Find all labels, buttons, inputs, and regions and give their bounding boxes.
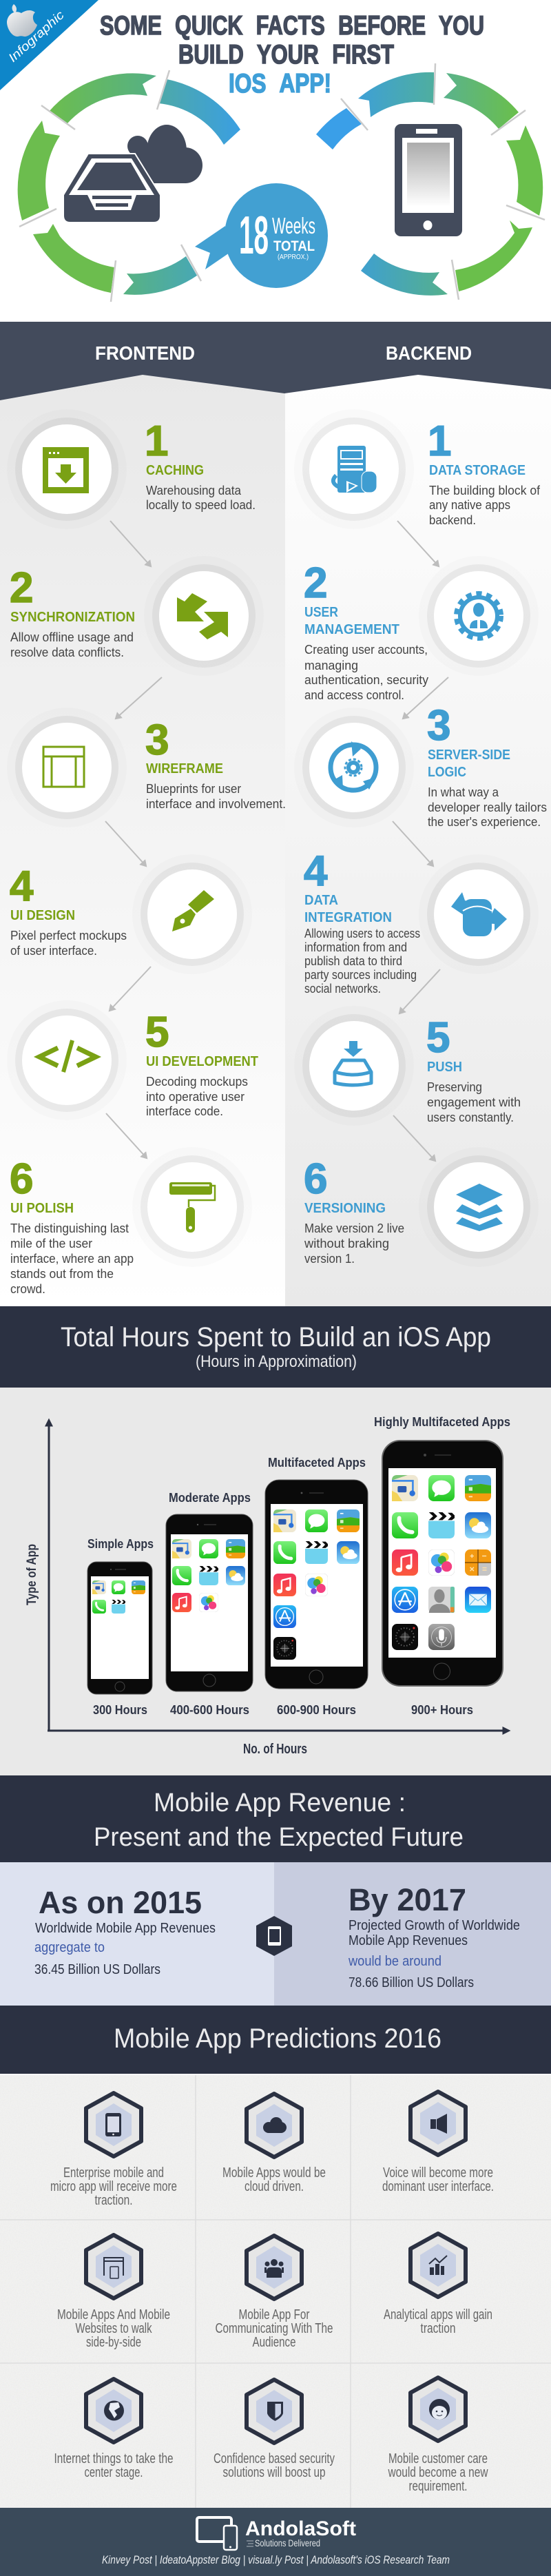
text: [222, 2165, 326, 2194]
number: 5: [426, 1014, 450, 1062]
description: [146, 1074, 248, 1118]
icon: browser and phone: [86, 2235, 141, 2298]
text: solutions will boost up: [223, 2465, 325, 2480]
text: center stage.: [84, 2465, 143, 2480]
description: party sources including: [304, 967, 417, 982]
description: [10, 630, 134, 659]
title: IOS APP!: [229, 69, 331, 99]
description: [304, 926, 420, 996]
heading: INTEGRATION: [304, 910, 392, 925]
heading: UI DESIGN: [10, 908, 75, 923]
heading: MANAGEMENT: [304, 622, 399, 637]
panel: by 2017: 78.66 Billion US Dollars: [349, 1975, 474, 1990]
heading: UI DEVELOPMENT: [146, 1054, 258, 1069]
icon: caching: [7, 409, 127, 529]
description: [427, 1080, 521, 1124]
panel: as on 2015: [0, 1862, 274, 2006]
title: BUILD YOUR FIRST: [178, 40, 394, 70]
text: [57, 2307, 170, 2350]
panel: as on 2015: aggregate to: [34, 1940, 105, 1955]
phone: moderate apps: [166, 1491, 253, 1717]
heading: USER: [304, 605, 338, 620]
panel: by 2017: Mobile App Revenues: [349, 1933, 468, 1948]
description: [304, 642, 429, 702]
icon: pen nib: [132, 854, 252, 974]
icon: speaker: [410, 2092, 466, 2155]
description: version 1.: [304, 1251, 355, 1266]
backend step 2: user management: [304, 556, 539, 702]
text: Voice will become more: [383, 2165, 493, 2181]
number: 5: [145, 1009, 169, 1056]
text: would become a new: [388, 2465, 488, 2480]
icon: growth chart: [410, 2234, 466, 2297]
description: interface and involvement.: [146, 796, 286, 811]
icon: cycle with gear: [294, 708, 414, 827]
heading: [428, 748, 510, 780]
callout: 18 weeks total: [195, 183, 328, 288]
heading: [304, 605, 399, 637]
text: cloud driven.: [245, 2179, 304, 2194]
description: The building block of: [429, 483, 541, 497]
panel: by 2017: Projected Growth of Worldwide: [349, 1918, 520, 1933]
corner banner: infographic: [0, 0, 98, 90]
logo: wordmark: Solutions Delivered: [255, 2538, 320, 2548]
text: Enterprise mobile and: [63, 2165, 164, 2181]
description: [146, 781, 286, 811]
text: Mobile Apps And Mobile: [57, 2307, 170, 2322]
heading: DATA: [304, 893, 338, 908]
text: Mobile Apps would be: [222, 2165, 326, 2181]
left cycle arrows: [18, 70, 240, 302]
icon: code brackets: [7, 1000, 127, 1120]
text: traction: [420, 2321, 456, 2336]
icon: shield: [247, 2380, 302, 2443]
section heading: total hours: (Hours in Approximation): [196, 1352, 357, 1371]
phone: moderate apps: 400-600 Hours: [170, 1703, 249, 1717]
number: 6: [304, 1155, 327, 1203]
number: 1: [145, 418, 168, 465]
description: stands out from the: [10, 1266, 114, 1281]
description: interface code.: [146, 1104, 223, 1118]
frontend backend backgrounds: [0, 322, 551, 1306]
callout: 18 weeks total: 18: [239, 205, 269, 265]
frontend step 5: ui development: [7, 1000, 258, 1120]
heading: DATA STORAGE: [429, 463, 526, 478]
text: [50, 2165, 177, 2208]
phone: highly multifaceted apps: [374, 1415, 510, 1717]
icon: phone in hexagon: [256, 1916, 292, 1956]
heading: WIREFRAME: [146, 761, 223, 776]
description: Allow offline usage and: [10, 630, 134, 644]
backend step 3: server-side logic: [294, 702, 547, 829]
text: [384, 2307, 492, 2336]
heading: [304, 893, 392, 925]
header band: BACKEND: [386, 342, 472, 364]
icon: gear with user: [419, 556, 539, 676]
panel: predictions grid: [0, 2075, 551, 2508]
icon: synchronization: [144, 556, 264, 676]
panel: as on 2015: Worldwide Mobile App Revenues: [35, 1921, 216, 1936]
title: [100, 11, 484, 99]
text: Confidence based security: [214, 2451, 335, 2466]
description: backend.: [429, 513, 476, 527]
phone: highly multifaceted apps: Highly Multifaceted Apps: [374, 1415, 510, 1429]
description: crowd.: [10, 1281, 45, 1296]
description: into operative user: [146, 1089, 245, 1104]
heading: LOGIC: [428, 765, 466, 780]
panel: by 2017: By 2017: [349, 1882, 466, 1917]
arrows between frontend steps: [105, 521, 162, 1158]
text: dominant user interface.: [382, 2179, 494, 2194]
callout: 18 weeks total: Weeks: [272, 213, 315, 238]
text: [388, 2451, 488, 2494]
logo: devices: [197, 2517, 237, 2550]
section heading: predictions: Mobile App Predictions 2016: [114, 2023, 441, 2054]
number: 2: [304, 559, 327, 607]
section heading: mobile app revenue: Present and the Expected Future: [94, 1823, 464, 1852]
frontend step 2: synchronization: [10, 556, 264, 676]
description: Blueprints for user: [146, 781, 241, 796]
text: Analytical apps will gain: [384, 2307, 492, 2322]
description: mile of the user: [10, 1236, 92, 1250]
icon: data storage: [294, 409, 414, 529]
phone: multifaceted apps: Multifaceted Apps: [268, 1456, 366, 1470]
panel: as on 2015: 36.45 Billion US Dollars: [34, 1962, 160, 1977]
backend step 1: data storage: [294, 409, 541, 529]
section heading: total hours: [0, 1306, 551, 1388]
text: side-by-side: [86, 2335, 141, 2350]
chart axes: [48, 1421, 508, 1731]
frontend step 3: wireframe: [7, 708, 286, 827]
number: 3: [145, 717, 169, 764]
number: 2: [10, 564, 33, 612]
description: publish data to third: [304, 954, 402, 968]
text: [214, 2451, 335, 2480]
heading: UI POLISH: [10, 1201, 74, 1216]
icon: layers: [419, 1147, 539, 1267]
description: Warehousing data: [146, 483, 242, 497]
heading: CACHING: [146, 463, 204, 478]
text: Websites to walk: [76, 2321, 152, 2336]
prediction 4: [57, 2235, 170, 2350]
phone: multifaceted apps: [265, 1456, 368, 1717]
description: Creating user accounts,: [304, 642, 428, 657]
description: [304, 1221, 404, 1266]
description: Decoding mockups: [146, 1074, 248, 1089]
description: [429, 483, 541, 527]
icon: paint roller: [132, 1147, 252, 1267]
text: [54, 2451, 174, 2480]
footer: [0, 2508, 551, 2576]
icon: smartphone: [395, 124, 462, 236]
frontend step 6: ui polish: [10, 1147, 252, 1296]
icon: phone: [86, 2093, 141, 2156]
prediction 9: [388, 2378, 488, 2494]
prediction 2: [222, 2094, 326, 2194]
callout: 18 weeks total: (APPROX.): [278, 254, 309, 261]
text: Mobile App For: [238, 2307, 310, 2322]
header band: FRONTEND: [95, 342, 195, 364]
description: In what way a: [428, 785, 499, 799]
logo: wordmark: AndolaSoft: [245, 2517, 356, 2540]
prediction 1: [50, 2093, 177, 2208]
number: 4: [304, 847, 328, 895]
description: authentication, security: [304, 672, 429, 687]
icon: globe: [86, 2379, 141, 2442]
number: 6: [10, 1155, 33, 1203]
prediction 3: [382, 2092, 494, 2194]
text: [215, 2307, 333, 2350]
arrows between backend steps: [393, 521, 448, 1161]
text: requirement.: [409, 2479, 467, 2494]
description: without braking: [304, 1236, 389, 1250]
description: and access control.: [304, 688, 404, 702]
description: of user interface.: [10, 943, 97, 958]
heading: VERSIONING: [304, 1201, 386, 1216]
hero section: [0, 0, 551, 322]
section heading: total hours: Total Hours Spent to Build an iOS App: [61, 1322, 491, 1352]
icon: wireframe: [7, 708, 127, 827]
description: [146, 483, 256, 512]
icon: cloud: [247, 2094, 302, 2157]
text: micro app will receive more: [50, 2179, 177, 2194]
backend step 5: push: [294, 1006, 521, 1126]
number: 4: [10, 863, 34, 910]
banner label: Infographic: [6, 8, 67, 65]
description: the user's experience.: [428, 814, 541, 829]
text: traction.: [95, 2193, 132, 2208]
panel: hours chart: [0, 1388, 551, 1775]
heading: SERVER-SIDE: [428, 748, 510, 763]
phone: simple apps: 300 Hours: [93, 1703, 147, 1717]
header band: [0, 322, 551, 400]
heading: SYNCHRONIZATION: [10, 610, 135, 625]
description: [10, 1221, 134, 1296]
frontend step 1: caching: [7, 409, 256, 529]
icon: data integration: [419, 854, 539, 974]
description: resolve data conflicts.: [10, 645, 124, 659]
text: Internet things to take the: [54, 2451, 174, 2466]
y axis label: Type of App: [25, 1544, 39, 1605]
frontend step 4: ui design: [10, 854, 252, 974]
description: locally to speed load.: [146, 497, 256, 512]
panel: as on 2015: As on 2015: [39, 1885, 202, 1920]
number: 3: [427, 702, 450, 750]
text: Communicating With The: [215, 2321, 333, 2336]
description: Pixel perfect mockups: [10, 928, 127, 942]
icon: audience: [247, 2236, 302, 2299]
section heading: mobile app revenue: [0, 1775, 551, 1862]
icon: push to inbox: [294, 1006, 414, 1126]
phone: multifaceted apps: 600-900 Hours: [277, 1703, 356, 1717]
text: [382, 2165, 494, 2194]
panel: by 2017: [274, 1862, 551, 2006]
phone: simple apps: [87, 1537, 154, 1717]
prediction 7: [54, 2379, 174, 2480]
description: Allowing users to access: [304, 926, 420, 940]
prediction 5: [215, 2236, 333, 2350]
description: Make version 2 live: [304, 1221, 404, 1235]
text: Audience: [252, 2335, 296, 2350]
section heading: predictions: [0, 2006, 551, 2074]
icon: customer care agent: [410, 2378, 466, 2441]
description: Preserving: [427, 1080, 482, 1094]
phone: highly multifaceted apps: 900+ Hours: [411, 1703, 473, 1717]
description: engagement with: [427, 1095, 521, 1109]
phone: moderate apps: Moderate Apps: [169, 1491, 251, 1505]
number: 1: [428, 418, 451, 465]
description: interface, where an app: [10, 1251, 134, 1266]
backend step 4: data integration: [304, 847, 539, 996]
heading: PUSH: [427, 1060, 462, 1075]
section heading: mobile app revenue: Mobile App Revenue :: [154, 1789, 406, 1817]
description: information from and: [304, 940, 407, 954]
description: any native apps: [429, 497, 510, 512]
description: [428, 785, 547, 829]
panel: by 2017: would be around: [348, 1954, 441, 1969]
icon: cloud and inbox: [63, 125, 202, 223]
text: Mobile customer care: [388, 2451, 488, 2466]
right cycle arrows: [316, 63, 545, 300]
description: social networks.: [304, 981, 381, 996]
backend step 6: versioning: [304, 1147, 539, 1267]
description: The distinguishing last: [10, 1221, 129, 1235]
sources: Kinvey Post | IdeatoAppster Blog | visual.ly Post | Andolasoft's iOS Research Team: [102, 2553, 450, 2566]
prediction 6: [384, 2234, 492, 2336]
prediction 8: [214, 2380, 335, 2480]
icon: apple: [7, 4, 37, 37]
description: managing: [304, 658, 358, 672]
callout: 18 weeks total: TOTAL: [273, 238, 315, 254]
description: [10, 928, 127, 958]
x axis label: No. of Hours: [243, 1742, 307, 1757]
description: users constantly.: [427, 1110, 514, 1124]
phone: simple apps: Simple Apps: [87, 1537, 154, 1551]
